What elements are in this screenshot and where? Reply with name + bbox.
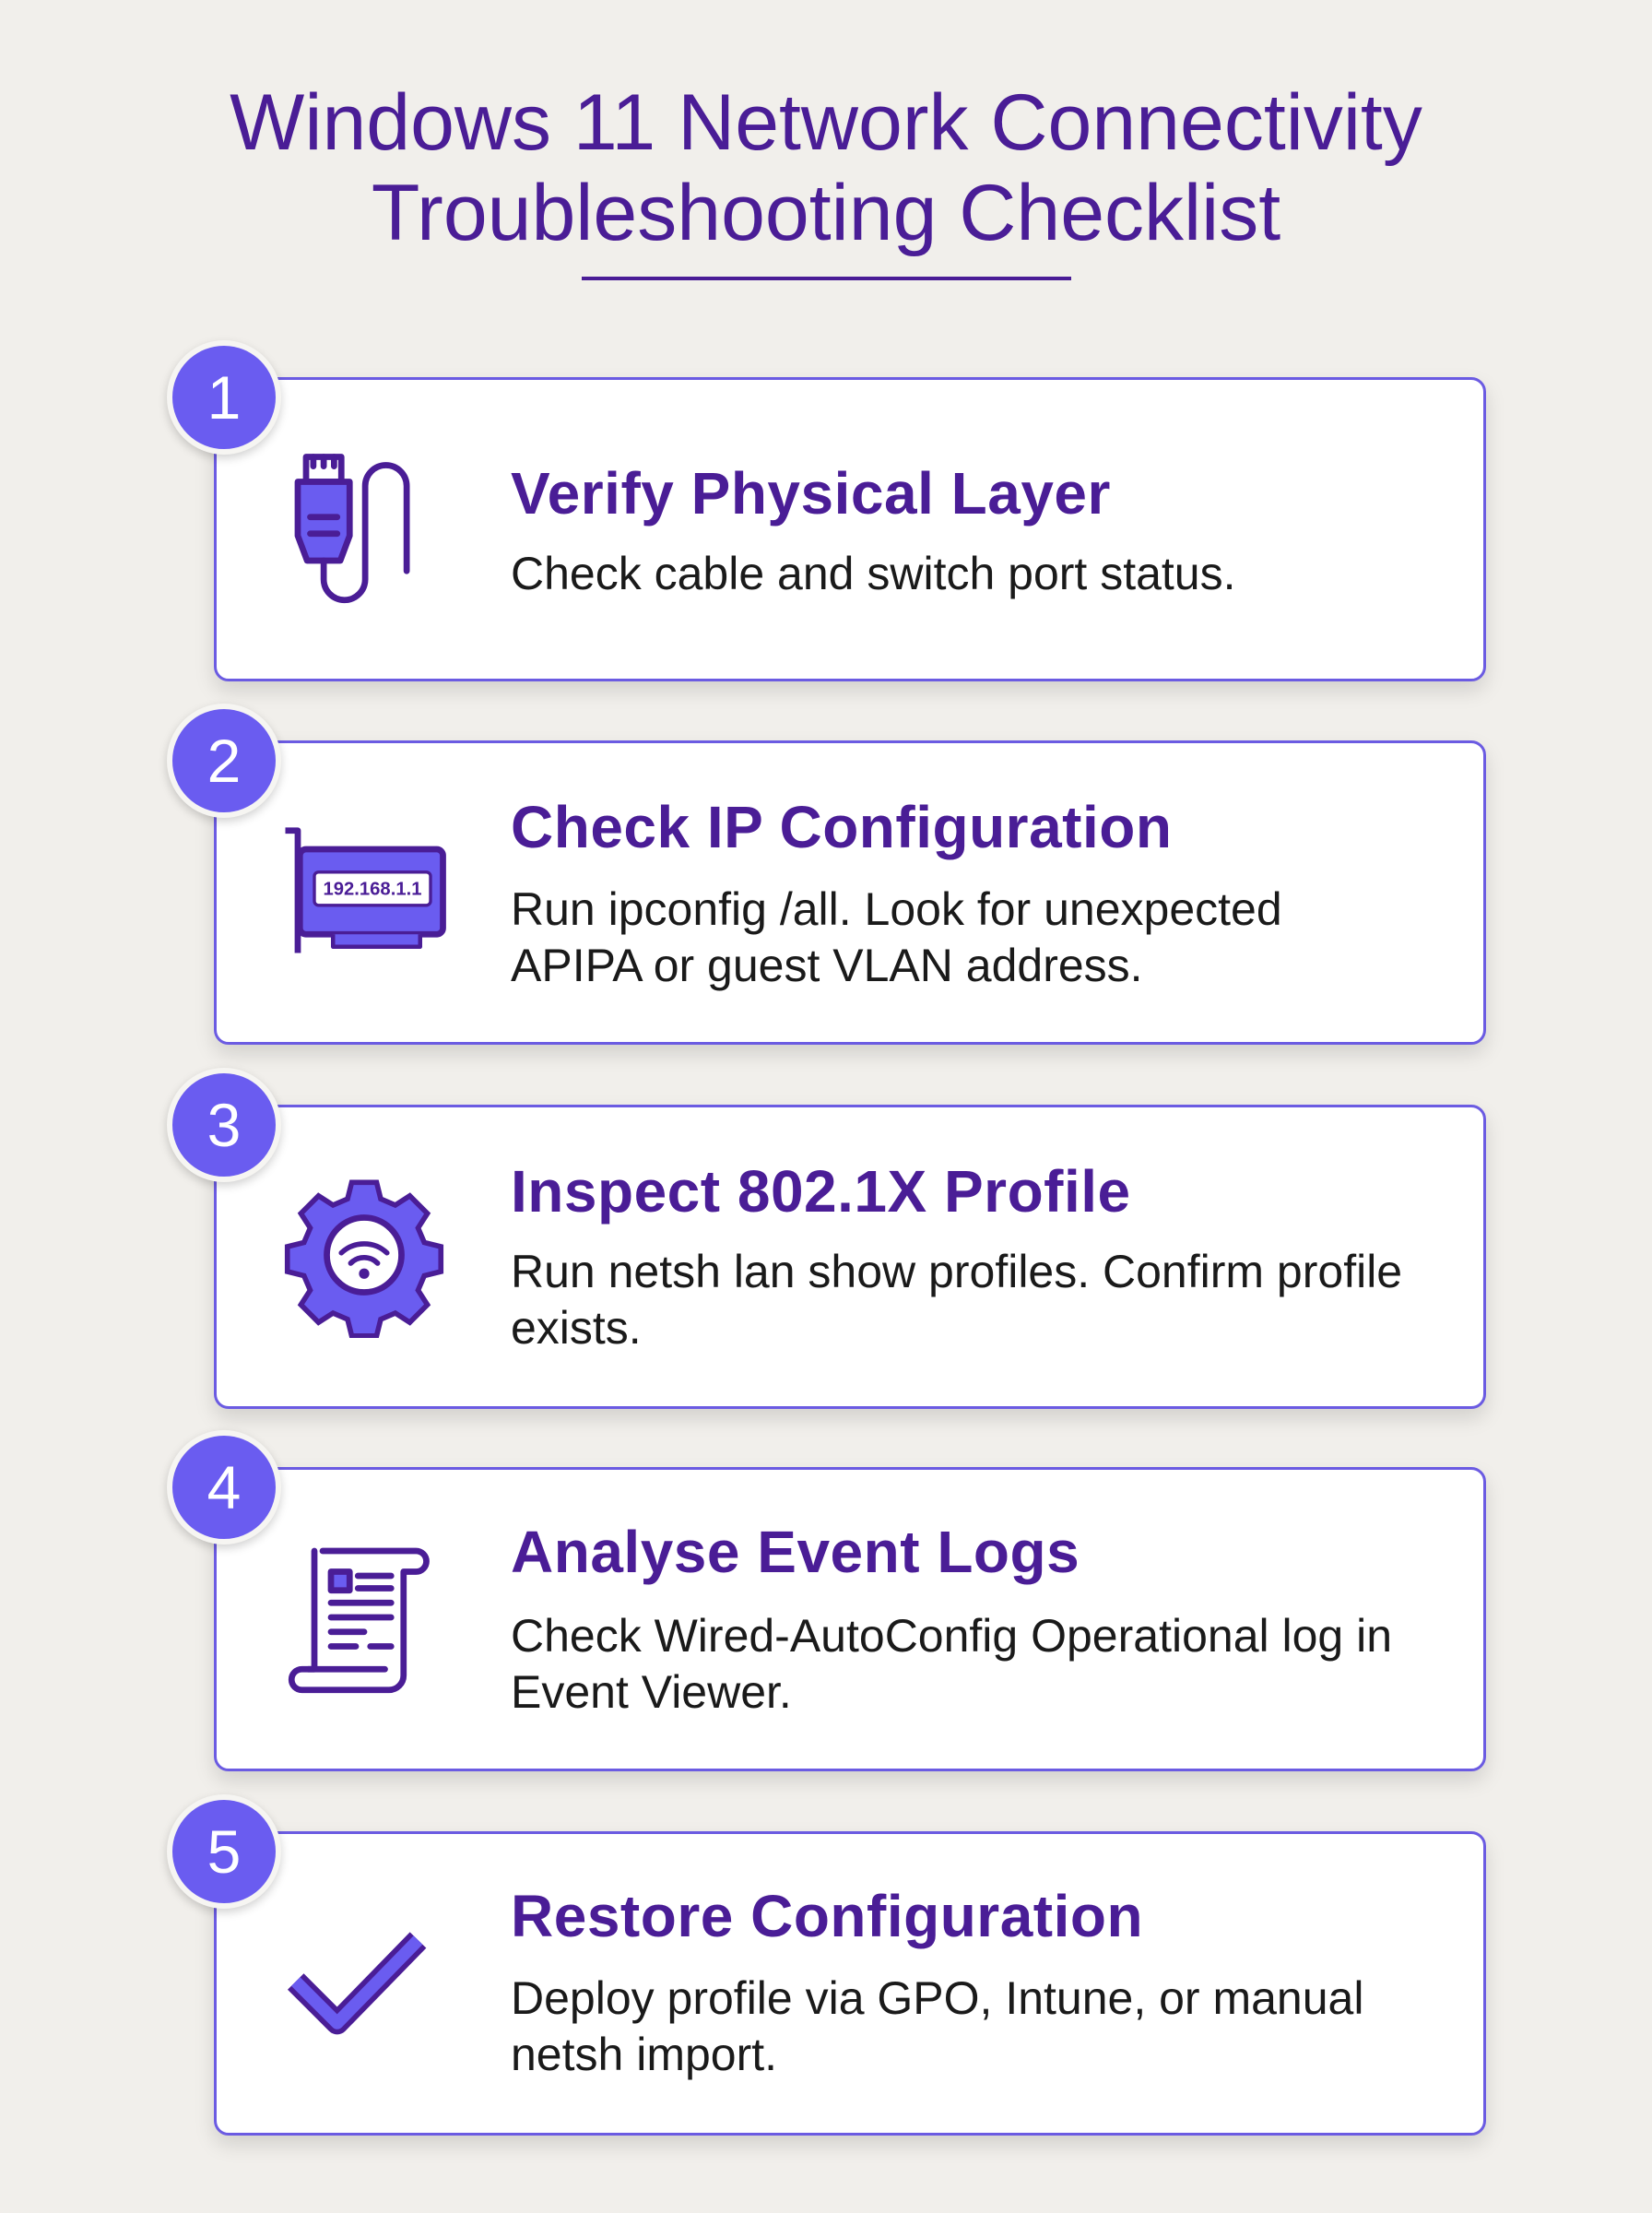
icon: network card: 192.168.1.1	[324, 880, 421, 900]
description	[511, 883, 1282, 991]
description: netsh import.	[511, 2029, 777, 2080]
title: Windows 11 Network Connectivity	[230, 78, 1422, 167]
panel: step 4	[214, 1467, 1486, 1771]
description: APIPA or guest VLAN address.	[511, 940, 1143, 991]
title: Troubleshooting Checklist	[372, 169, 1280, 257]
description: exists.	[511, 1302, 642, 1354]
heading: Analyse Event Logs	[511, 1519, 1080, 1585]
description	[511, 1610, 1392, 1718]
panel: step 2	[214, 740, 1486, 1045]
icon: network card	[286, 827, 446, 953]
description	[511, 1972, 1363, 2080]
description: Event Viewer.	[511, 1666, 792, 1718]
icon: log scroll	[288, 1547, 430, 1693]
badge 5	[167, 1794, 281, 1909]
heading: Inspect 802.1X Profile	[511, 1158, 1131, 1225]
description	[511, 1246, 1402, 1354]
badge 1: 1	[207, 363, 241, 432]
description: Check cable and switch port status.	[511, 548, 1235, 599]
description: Deploy profile via GPO, Intune, or manual	[511, 1972, 1363, 2024]
badge 3: 3	[207, 1091, 241, 1159]
description: Check Wired-AutoConfig Operational log in	[511, 1610, 1392, 1662]
icon: ethernet cable	[295, 454, 409, 603]
description: Run ipconfig /all. Look for unexpected	[511, 883, 1282, 935]
heading: Verify Physical Layer	[511, 460, 1111, 527]
title	[230, 78, 1422, 257]
badge 1	[167, 340, 281, 455]
icon: checkmark	[288, 1932, 426, 2034]
heading: Check IP Configuration	[511, 794, 1172, 860]
description: Run netsh lan show profiles. Confirm profile	[511, 1246, 1402, 1297]
badge 4	[167, 1430, 281, 1544]
badge 3	[167, 1068, 281, 1182]
badge 5: 5	[207, 1817, 241, 1886]
badge 2: 2	[207, 727, 241, 795]
heading: Restore Configuration	[511, 1883, 1143, 1949]
icon: gear with wifi	[284, 1180, 444, 1338]
badge 4: 4	[207, 1453, 241, 1521]
panel: step 3	[214, 1105, 1486, 1409]
badge 2	[167, 704, 281, 818]
panel: step 1	[214, 377, 1486, 681]
panel: step 5	[214, 1831, 1486, 2136]
